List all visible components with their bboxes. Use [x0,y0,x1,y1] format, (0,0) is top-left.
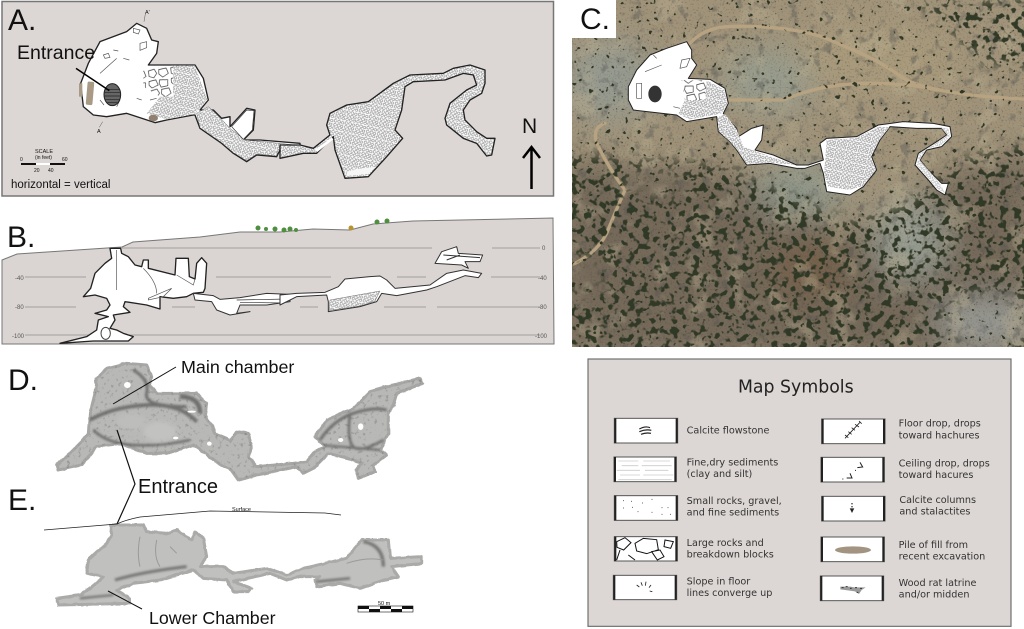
north label: N [522,115,537,138]
scale bar: (in feet) [35,155,52,161]
symbol: ceiling drop: Ceiling drop, drops [899,459,990,470]
symbol: small rocks: and fine sediments [687,507,779,518]
depth labels: -80 [538,305,547,311]
symbol: calcite flowstone: Calcite flowstone [687,425,770,436]
heading A: A. [8,4,36,37]
panel D: 3D model plan view [53,360,427,483]
symbol: floor drop: toward hachures [899,430,979,441]
cave profile: eastern passages [280,247,483,312]
symbol: pile of fill: Pile of fill from [899,540,968,551]
cave profile: main chamber [60,248,290,343]
section line labels [99,14,145,127]
scale bar: SCALE [35,149,53,155]
trees on surface [256,218,390,232]
lower chamber label: Lower Chamber [149,608,276,628]
symbol: calcite columns [822,495,976,521]
entrance pit [648,86,662,102]
entrance label: Entrance [17,42,95,64]
panel A: plan view map [2,2,554,196]
symbol: large rocks: Large rocks and [687,538,764,549]
symbol: pile of fill [821,537,985,563]
symbol: floor drop: Floor drop, drops [899,419,981,430]
symbol: small rocks [614,496,782,520]
cave overlay on photo [628,42,952,195]
scale bar: 40 [48,168,54,174]
scale note: horizontal = vertical [11,179,110,191]
heading E: E. [8,484,36,517]
heading D: D. [8,364,38,397]
symbol: small rocks: Small rocks, gravel, [687,496,782,507]
symbol: fine dry sediments: (clay and silt) [687,469,752,480]
depth labels: 0 [542,246,546,252]
symbol: calcite flowstone [614,418,770,443]
symbol: slope in floor: Slope in floor [687,576,750,587]
symbol: ceiling drop: toward hacures [899,470,973,481]
depth labels: -100 [535,334,548,340]
entrance pit [104,84,121,106]
depth labels: -100 [12,334,25,340]
label A: A [97,129,101,135]
heading C [570,0,616,38]
symbol: floor drop [822,419,981,444]
main chamber label: Main chamber [181,357,294,377]
symbol: wood rat latrine [820,576,977,601]
heading C: C. [580,3,610,36]
scale bar: 20 [34,168,40,174]
panel C: aerial photograph with map overlay [560,0,1024,360]
north arrow [523,147,540,189]
shading on profile model [80,537,383,598]
depth labels: -80 [15,305,24,311]
scale bar: 60 [62,157,68,163]
symbol: calcite columns: and stalactites [899,507,970,518]
scale bar: 0 [20,157,23,163]
symbol: wood rat latrine: and/or midden [899,590,969,601]
symbol: large rocks: breakdown blocks [687,549,774,560]
cave plan: east section [280,65,495,178]
shading on model [66,364,422,479]
depth labels: -40 [15,276,24,282]
cave plan: west section [76,14,300,162]
panel E: 3D model profile view [57,525,422,605]
depth labels [12,246,548,340]
symbol: ceiling drop [821,457,990,482]
symbol: slope in floor: lines converge up [687,588,772,599]
panel: map symbols legend [588,359,1011,626]
symbol: fine dry sediments: Fine,dry sediments [687,458,778,469]
fill pile [86,81,94,105]
lower chamber leader [108,591,142,609]
heading B: B. [7,221,35,254]
scale bar [20,149,68,174]
metric scale bar: 50 m [378,601,391,607]
entrance label: Entrance [138,476,218,498]
model holes [124,382,363,446]
metric scale bar [358,601,413,612]
panel B: profile section [2,218,554,344]
symbol: slope in floor [613,575,772,600]
surface line [44,511,341,530]
symbol: wood rat latrine: Wood rat latrine [899,578,977,589]
label A prime: A' [145,10,150,16]
symbol: fine dry sediments [614,457,778,482]
entrance leader [76,68,109,91]
surface label: Surface [232,507,251,513]
symbol: pile of fill: recent excavation [899,552,985,563]
dirt roads [572,26,1023,265]
main chamber leader [113,367,176,404]
symbol: calcite columns: Calcite columns [899,495,976,506]
legend title: Map Symbols [738,377,854,397]
depth labels: -40 [538,276,547,282]
depth grid lines [25,248,540,335]
symbol: large rocks [614,537,774,561]
entrance leader lines [117,430,135,524]
